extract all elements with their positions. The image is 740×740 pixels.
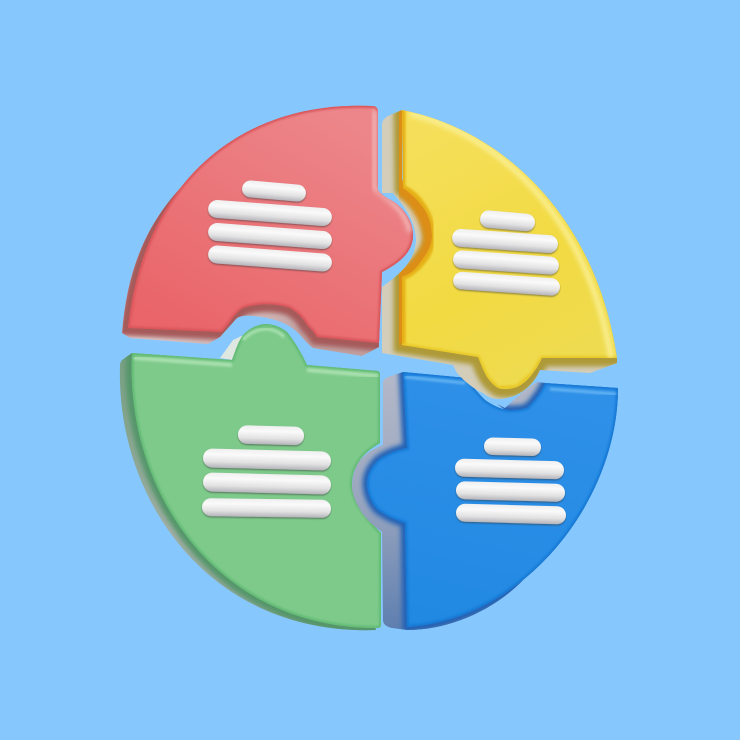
text lines: yellow	[452, 210, 560, 296]
text lines: green	[202, 425, 331, 518]
text lines: red	[207, 180, 333, 272]
puzzle piece: red	[122, 106, 413, 356]
text lines: blue	[455, 437, 566, 524]
puzzle piece: yellow	[382, 110, 617, 399]
puzzle piece: blue	[352, 372, 618, 630]
illustration: four-piece circular puzzle	[120, 106, 618, 630]
puzzle piece: green	[120, 324, 381, 630]
